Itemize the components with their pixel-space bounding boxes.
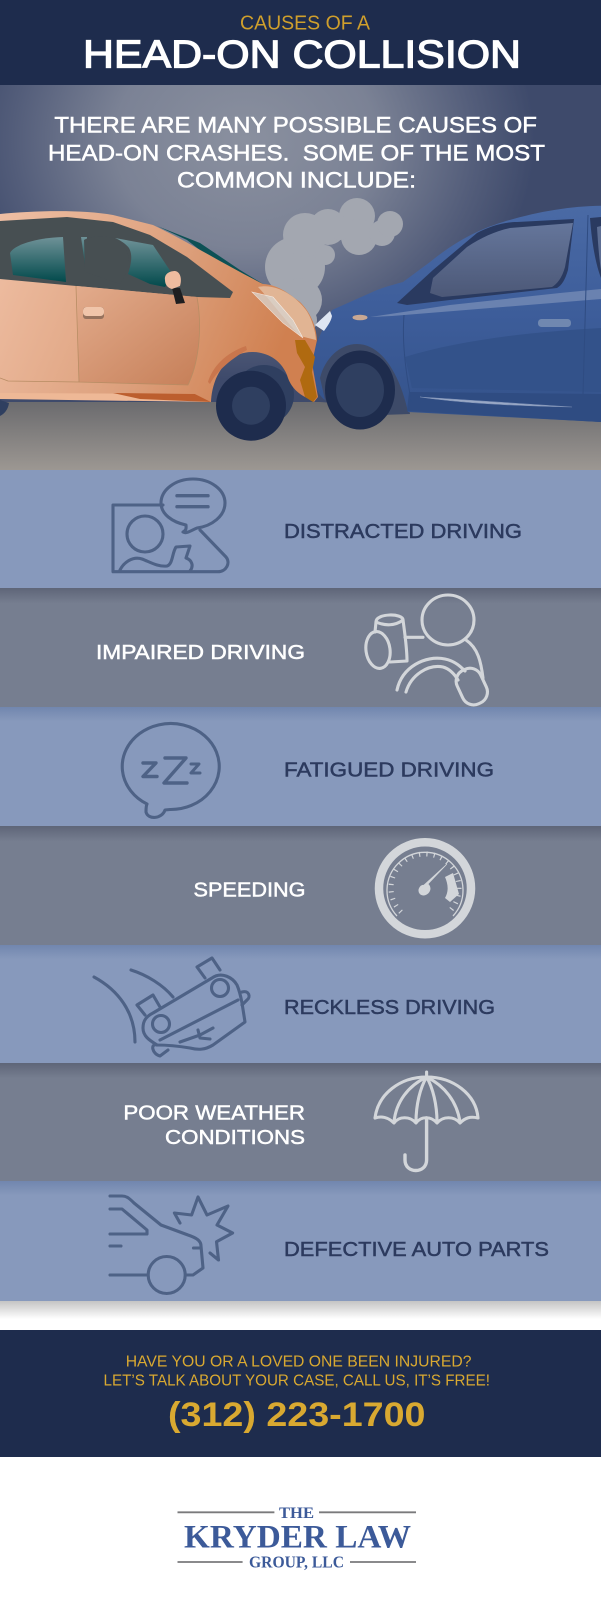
intro text: HEAD-ON CRASHES. SOME OF THE MOST [48,141,545,166]
band: impaired driving [0,588,601,709]
band: distracted driving [0,470,601,588]
band: poor weather conditions [0,1063,601,1181]
band: defective auto parts [0,1181,601,1301]
label: IMPAIRED DRIVING [96,641,305,664]
header banner [0,0,601,85]
icon: driver on phone [113,479,228,572]
law firm logo: THE [279,1505,314,1522]
label: CONDITIONS [165,1126,305,1149]
icon: driver with drink [364,595,491,709]
band: reckless driving [0,945,601,1063]
phone number: (312) 223-1700 [168,1396,426,1434]
intro text [48,113,545,193]
label: RECKLESS DRIVING [284,996,495,1019]
smoke [265,198,403,334]
label: DEFECTIVE AUTO PARTS [284,1238,549,1261]
blue car [312,206,601,430]
call to action text: HAVE YOU OR A LOVED ONE BEEN INJURED? [126,1354,472,1371]
icon: front-end collision [110,1196,233,1294]
orange car [0,211,318,441]
label: SPEEDING [194,879,306,902]
icon: overturned car [94,958,249,1056]
law firm logo: GROUP, LLC [249,1553,344,1572]
call to action text [104,1354,490,1390]
call to action text: LET’S TALK ABOUT YOUR CASE, CALL US, IT’S FREE! [104,1373,490,1390]
label [123,1101,305,1149]
label: FATIGUED DRIVING [284,759,494,782]
band: fatigued driving [0,707,601,826]
label: DISTRACTED DRIVING [284,520,522,543]
main title: HEAD-ON COLLISION [83,34,521,77]
law firm logo [178,1505,416,1572]
icon: umbrella [375,1072,478,1170]
law firm logo: KRYDER LAW [184,1520,411,1556]
label: POOR WEATHER [123,1101,305,1124]
hero crash scene [0,85,601,470]
intro text: THERE ARE MANY POSSIBLE CAUSES OF [54,113,537,138]
intro text: COMMON INCLUDE: [177,168,416,193]
header kicker: CAUSES OF A [240,12,371,34]
shadow under bands [0,1301,601,1319]
band: speeding [0,826,601,945]
icon: speedometer [379,842,471,934]
call to action panel [0,1330,601,1457]
icon: sleep bubble [122,724,219,817]
